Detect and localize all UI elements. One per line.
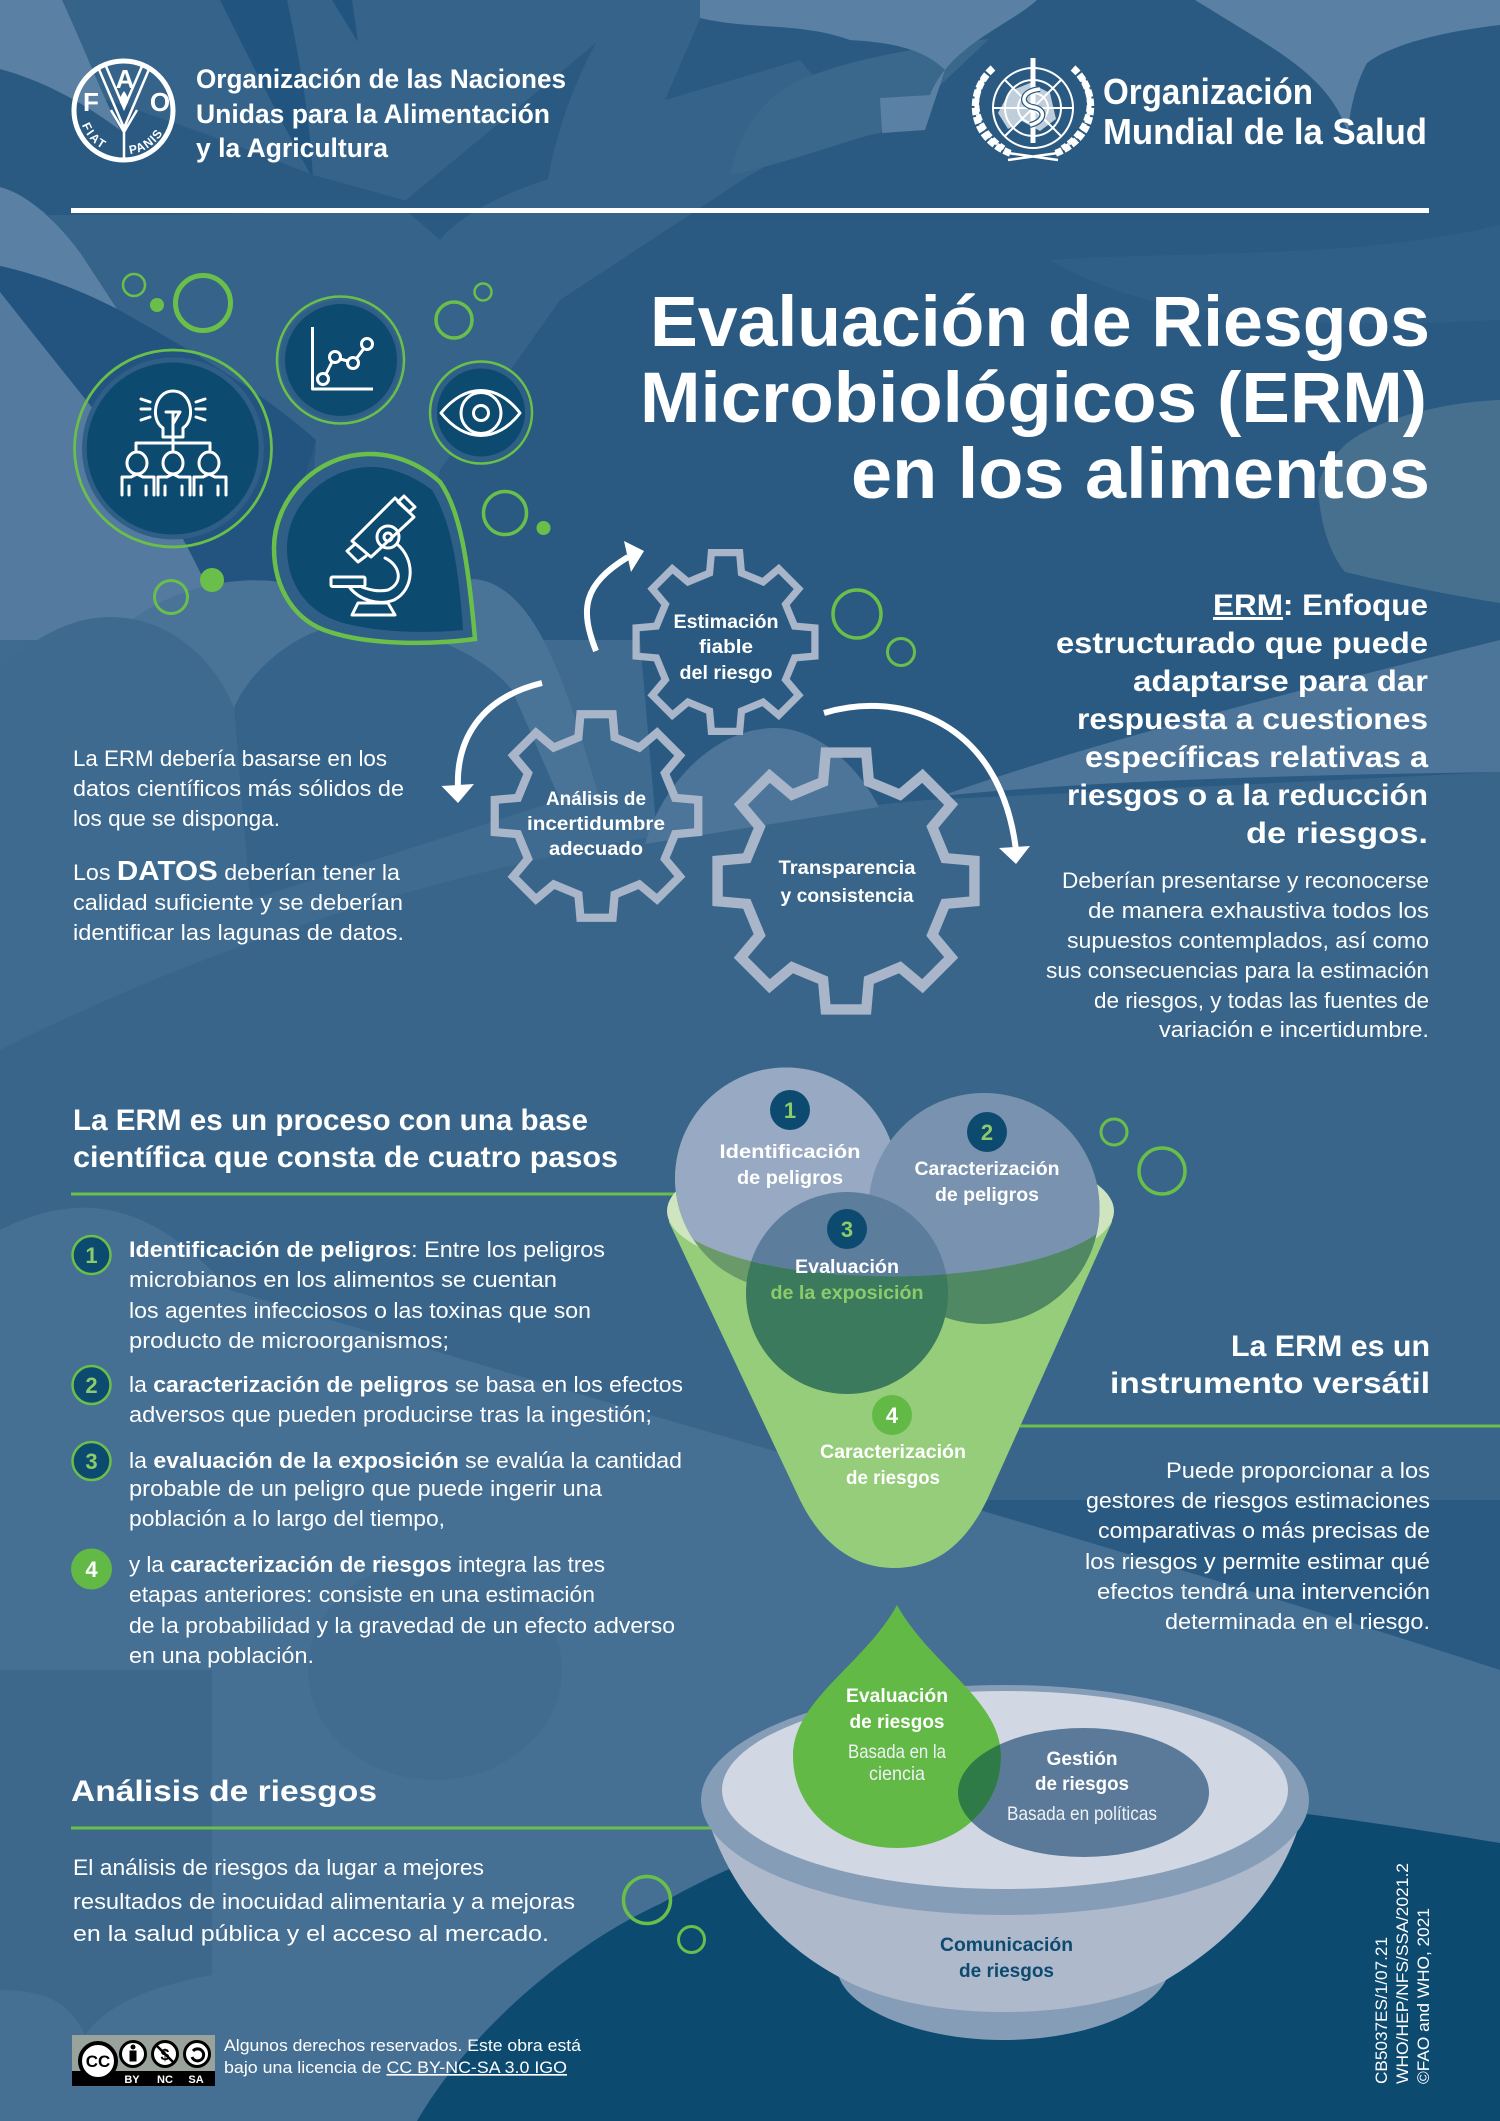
text: datos: identificar las lagunas de datos. [73, 920, 404, 945]
logo: WHO [975, 58, 1091, 160]
callout: ERM definition: respuesta a cuestiones [1077, 703, 1428, 736]
logo: FAO: F [83, 87, 99, 117]
gear: Estimación: fiable [699, 636, 753, 658]
arrow: to Análisis [442, 683, 542, 803]
step 3: probable de un peligro que puede ingerir una [129, 1476, 603, 1501]
logo: FAO: FIAT [82, 122, 106, 148]
gear: Análisis: adecuado [549, 838, 643, 860]
funnel diagram: de peligros [737, 1167, 843, 1189]
text: risk analysis: resultados de inocuidad alimentaria y a mejoras [73, 1889, 575, 1914]
callout: ERM definition: adaptarse para dar [1133, 665, 1428, 698]
logo: FAO: PANIS [129, 130, 162, 154]
license text: Algunos derechos reservados. Este obra está [224, 2037, 582, 2055]
document codes [1372, 1863, 1433, 2084]
heading: four steps: La ERM es un proceso con una base [73, 1104, 588, 1137]
arrow: to Estimación [587, 541, 644, 651]
callout: ERM definition: riesgos o a la reducción [1067, 779, 1428, 812]
logo: FAO [72, 58, 176, 162]
text: datos: Los DATOS deberían tener la [73, 855, 401, 886]
callout: ERM definition: ERM: Enfoque [1213, 589, 1428, 622]
gear: Análisis [495, 714, 698, 918]
title: en los alimentos [851, 435, 1430, 514]
step 1: microbianos en los alimentos se cuentan [129, 1267, 557, 1292]
license badge: SA [188, 2074, 204, 2086]
bowl diagram: Evaluación [846, 1685, 948, 1707]
bowl diagram: Comunicación [940, 1934, 1073, 1956]
step 1: los agentes infecciosos o las toxinas que son [129, 1298, 591, 1323]
callout: ERM definition: de riesgos. [1246, 817, 1428, 850]
FAO name [196, 64, 566, 163]
funnel diagram: de peligros [935, 1184, 1039, 1206]
funnel diagram [667, 1068, 1114, 1568]
bowl diagram: de riesgos [850, 1711, 945, 1733]
step 3 [72, 1442, 682, 1531]
text: versatile tool: gestores de riesgos estimaciones [1086, 1488, 1430, 1513]
step 2 [72, 1366, 683, 1427]
text: assumptions: de manera exhaustiva todos los [1088, 898, 1429, 923]
header rule [71, 208, 1429, 213]
bowl diagram: ciencia [869, 1763, 925, 1785]
license text [224, 2037, 582, 2077]
funnel diagram: Evaluación [795, 1256, 899, 1278]
funnel diagram: de la exposición [770, 1282, 924, 1304]
document codes: ©FAO and WHO, 2021 [1414, 1908, 1433, 2084]
text: datos: La ERM debería basarse en los [73, 746, 387, 771]
step 4: etapas anteriores: consiste en una estimación [129, 1582, 595, 1607]
step 1: Identificación de peligros : Entre los peligros [129, 1237, 605, 1262]
text: versatile tool [1085, 1458, 1430, 1634]
step 4 [71, 1548, 675, 1668]
text: versatile tool: Puede proporcionar a los [1166, 1458, 1430, 1483]
bowl diagram [701, 1605, 1309, 2040]
gear: Transparencia: Transparencia [778, 857, 916, 879]
text: datos [73, 746, 404, 945]
text: assumptions: de riesgos, y todas las fuentes de [1094, 988, 1429, 1013]
document codes: WHO/HEP/NFS/SSA/2021.2 [1393, 1863, 1412, 2084]
step 4: y la caracterización de riesgos integra las tres [129, 1552, 605, 1577]
step 4: de la probabilidad y la gravedad de un efecto adverso [129, 1613, 675, 1638]
FAO name: Organización de las Naciones [196, 64, 566, 94]
step 1: 1 [85, 1243, 98, 1268]
funnel diagram: 4 [886, 1403, 899, 1428]
text: risk analysis [73, 1855, 575, 1946]
text: assumptions: variación e incertidumbre. [1159, 1017, 1429, 1042]
step 3: la evaluación de la exposición se evalúa la cantidad [129, 1448, 682, 1473]
license badge: CC [86, 2052, 110, 2071]
step 3: población a lo largo del tiempo, [129, 1506, 445, 1531]
text: risk analysis: El análisis de riesgos da lugar a mejores [73, 1855, 484, 1880]
heading: versatile tool: La ERM es un [1231, 1330, 1430, 1363]
logo: FAO: O [150, 87, 170, 117]
callout: ERM definition [1056, 589, 1428, 850]
text: versatile tool: determinada en el riesgo. [1165, 1609, 1430, 1634]
title: Evaluación de Riesgos [650, 283, 1430, 362]
license badge [72, 2035, 215, 2086]
WHO name: Organización [1103, 71, 1313, 112]
bowl diagram: Gestión [1046, 1748, 1118, 1770]
text: assumptions: Deberían presentarse y reconocerse [1062, 868, 1429, 893]
icon: line chart [277, 296, 404, 424]
step 2: adversos que pueden producirse tras la ingestión; [129, 1402, 652, 1427]
bowl diagram: Basada en la [848, 1741, 946, 1763]
text: datos: calidad suficiente y se deberían [73, 890, 403, 915]
decorative rings right of funnel [1101, 1119, 1185, 1194]
decorative rings top [123, 274, 914, 666]
funnel diagram: Caracterización [820, 1441, 966, 1463]
gear: Estimación: del riesgo [680, 662, 773, 684]
text: datos: los que se disponga. [73, 806, 280, 831]
license text: bajo una licencia de CC BY-NC-SA 3.0 IGO [224, 2059, 567, 2077]
heading: four steps [73, 1104, 618, 1174]
heading: versatile tool: instrumento versátil [1110, 1367, 1430, 1400]
icon: microscope [274, 454, 475, 643]
callout: ERM definition: específicas relativas a [1085, 741, 1428, 774]
bowl diagram: de riesgos [1035, 1773, 1129, 1795]
heading: risk analysis: Análisis de riesgos [71, 1775, 377, 1808]
WHO name: Mundial de la Salud [1103, 111, 1427, 152]
gear: Transparencia [718, 753, 974, 1009]
text: risk analysis: en la salud pública y el acceso al mercado. [73, 1921, 549, 1946]
funnel diagram: 2 [981, 1120, 993, 1145]
gear: Estimación [636, 553, 815, 731]
text: assumptions: supuestos contemplados, así como [1067, 928, 1429, 953]
decorative rings bottom [624, 1876, 704, 1952]
license badge: $ [161, 2047, 170, 2064]
gear: Estimación: Estimación [674, 611, 778, 633]
text: versatile tool: los riesgos y permite estimar qué [1085, 1549, 1430, 1574]
text: assumptions [1046, 868, 1429, 1042]
gear: Análisis: incertidumbre [527, 813, 665, 835]
step 3: 3 [85, 1449, 98, 1474]
funnel diagram: 1 [784, 1098, 796, 1123]
FAO name: y la Agricultura [196, 133, 389, 163]
text: datos: datos científicos más sólidos de [73, 776, 404, 801]
funnel diagram: 3 [841, 1217, 853, 1242]
gear: Análisis: Análisis de [546, 788, 646, 810]
text: versatile tool: efectos tendrá una intervención [1097, 1579, 1430, 1604]
WHO name [1103, 71, 1427, 152]
arrow: to Transparencia [824, 706, 1030, 864]
text: assumptions: sus consecuencias para la estimación [1046, 958, 1429, 983]
funnel diagram: de riesgos [846, 1467, 940, 1489]
icon: eye [430, 362, 532, 464]
step 1: producto de microorganismos; [129, 1328, 449, 1353]
bowl diagram: de riesgos [959, 1960, 1054, 1982]
text: versatile tool: comparativas o más precisas de [1098, 1518, 1430, 1543]
FAO name: Unidas para la Alimentación [196, 99, 550, 129]
license badge: BY [124, 2074, 140, 2086]
document codes: CB5037ES/1/07.21 [1372, 1937, 1391, 2084]
funnel diagram: Caracterización [914, 1158, 1060, 1180]
title [640, 283, 1430, 514]
bowl diagram: Basada en políticas [1007, 1803, 1157, 1825]
step 1 [72, 1236, 605, 1353]
callout: ERM definition: estructurado que puede [1056, 627, 1428, 660]
heading: versatile tool [1110, 1330, 1430, 1400]
logo: FAO: A [116, 64, 135, 94]
license badge: NC [157, 2074, 173, 2086]
step 2: 2 [85, 1373, 98, 1398]
step 4: 4 [85, 1557, 98, 1582]
step 4: en una población. [129, 1643, 314, 1668]
heading: four steps: científica que consta de cuatro pasos [73, 1141, 618, 1174]
step 2: la caracterización de peligros se basa en los efectos [129, 1372, 683, 1397]
gear: Transparencia: y consistencia [780, 885, 914, 907]
title: Microbiológicos (ERM) [640, 359, 1427, 438]
icon: lightbulb and team [74, 350, 272, 547]
funnel diagram: Identificación [720, 1141, 860, 1163]
